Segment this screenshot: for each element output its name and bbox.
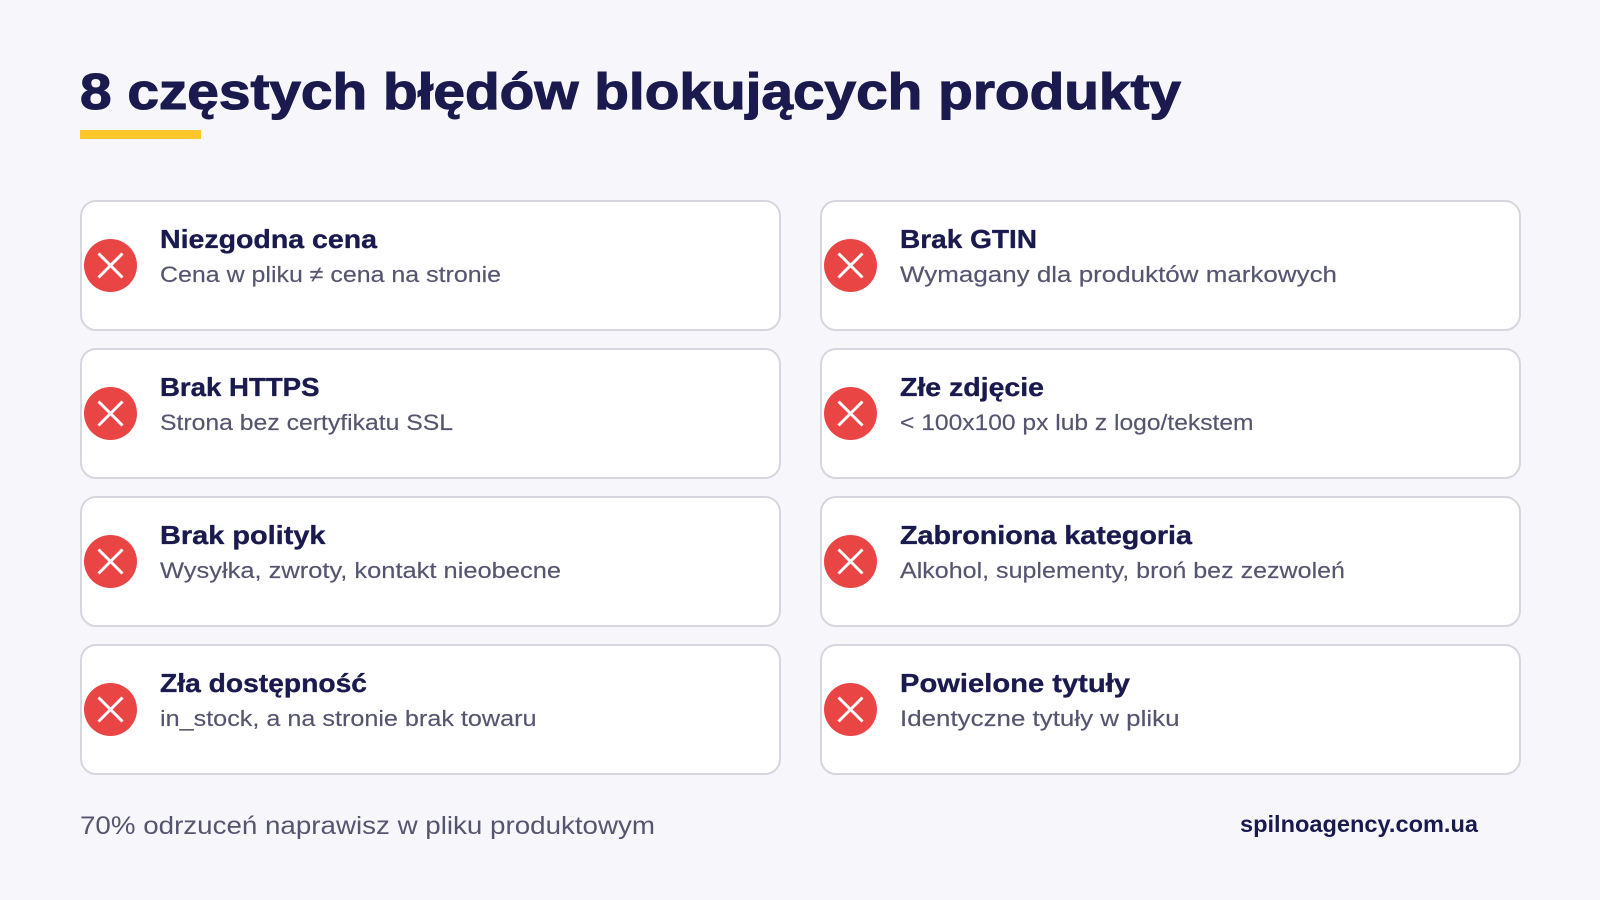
text: Brak polityk description: Wysyłka, zwroty, kontakt nieobecne <box>160 558 561 583</box>
heading: Powielone tytuły: Powielone tytuły <box>900 668 1131 698</box>
icon: red cross <box>824 683 877 736</box>
footer note: 70% odrzuceń naprawisz w pliku produktowym <box>80 812 655 840</box>
icon: red cross <box>824 387 877 440</box>
icon: red cross <box>84 683 137 736</box>
panel: Powielone tytuły <box>821 645 1520 774</box>
heading: Niezgodna cena: Niezgodna cena <box>160 224 378 254</box>
text: Niezgodna cena description: Cena w pliku ≠ cena na stronie <box>160 262 501 287</box>
heading: Zabroniona kategoria: Zabroniona kategoria <box>900 520 1193 550</box>
text: Zabroniona kategoria description: Alkohol, suplementy, broń bez zezwoleń <box>900 558 1345 583</box>
icon: red cross <box>84 535 137 588</box>
heading: Zła dostępność: Zła dostępność <box>160 668 367 698</box>
text: Powielone tytuły description: Identyczne tytuły w pliku <box>900 706 1180 731</box>
heading: Brak GTIN: Brak GTIN <box>900 224 1037 254</box>
panel: Brak HTTPS <box>81 349 780 478</box>
text: Brak GTIN description: Wymagany dla produktów markowych <box>900 262 1337 287</box>
panel: Zabroniona kategoria <box>821 497 1520 626</box>
icon: red cross <box>84 239 137 292</box>
icon: red cross <box>824 239 877 292</box>
icon: red cross <box>824 535 877 588</box>
text: Zła dostępność description: in_stock, a na stronie brak towaru <box>160 706 536 731</box>
text: Brak HTTPS description: Strona bez certyfikatu SSL <box>160 410 453 435</box>
panel: Brak polityk <box>81 497 780 626</box>
panel: Zła dostępność <box>81 645 780 774</box>
panel: Brak GTIN <box>821 201 1520 330</box>
icon: red cross <box>84 387 137 440</box>
panel: Złe zdjęcie <box>821 349 1520 478</box>
heading: Złe zdjęcie: Złe zdjęcie <box>900 372 1044 402</box>
text: Złe zdjęcie description: < 100x100 px lub z logo/tekstem <box>900 410 1254 435</box>
footer website: spilnoagency.com.ua <box>1240 811 1479 837</box>
title: 8 częstych błędów blokujących produkty <box>80 63 1182 120</box>
heading: Brak HTTPS: Brak HTTPS <box>160 372 320 402</box>
heading: Brak polityk: Brak polityk <box>160 520 326 550</box>
panel: Niezgodna cena <box>81 201 780 330</box>
title accent bar <box>80 130 201 139</box>
